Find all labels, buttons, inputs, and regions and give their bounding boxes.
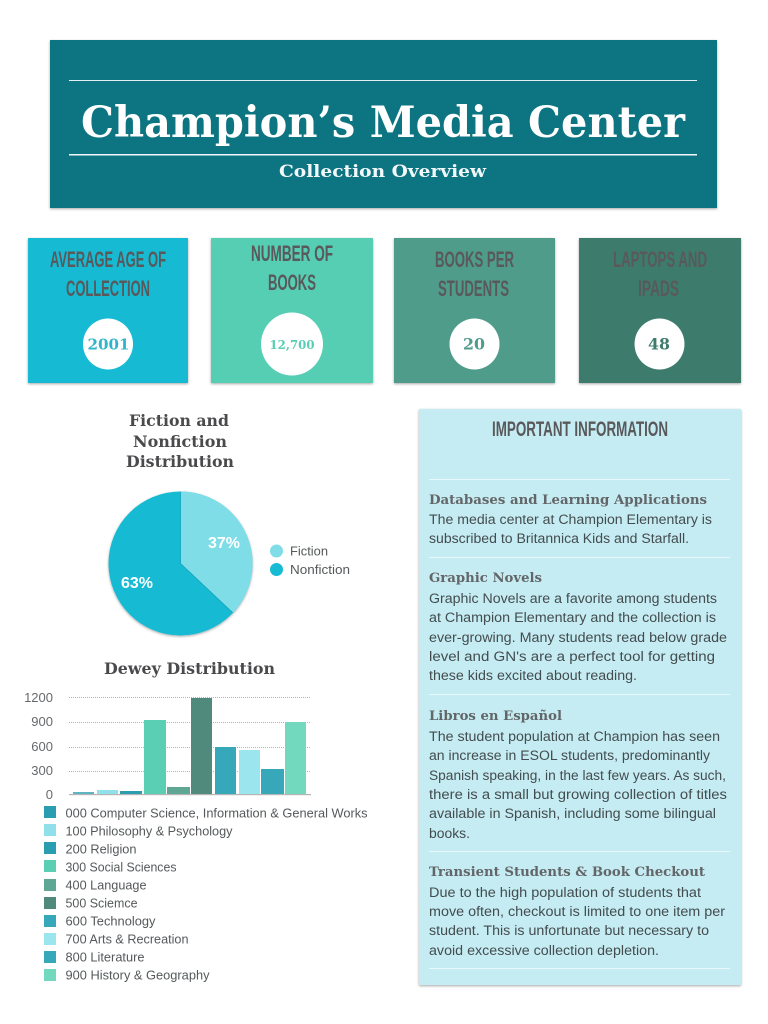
panel: laptops and ipads (579, 238, 741, 383)
panel: books per students: BOOKS PER (435, 247, 514, 272)
bar chart: dewey: 0 (46, 787, 53, 802)
heading: dewey distribution: Dewey Distribution (104, 659, 275, 678)
heading: fiction and nonfiction (126, 411, 234, 471)
text block: libros en espanol: The student population at Champion has seen (429, 729, 720, 744)
panel: number of books: NUMBER OF (251, 241, 333, 266)
heading: fiction and nonfiction: Nonfiction (133, 432, 227, 451)
heading: important information: IMPORTANT INFORMATION (492, 418, 668, 441)
text block: transient students: Due to the high population of students that (429, 885, 701, 900)
pie chart: 37% (208, 535, 240, 552)
bar chart: dewey: 1200 (24, 690, 53, 705)
legend: dewey: 800 Literature (66, 950, 145, 964)
text block: transient students (429, 865, 726, 958)
text block: libros en espanol (429, 709, 727, 841)
legend: dewey: 100 Philosophy & Psychology (66, 824, 233, 838)
text block: transient students: Transient Students & Book Checkout (429, 865, 705, 880)
text block: databases: Databases and Learning Applications (429, 493, 707, 508)
text block: graphic novels (429, 571, 727, 683)
text block: transient students: avoid excessive collection depletion. (429, 943, 659, 958)
text block: graphic novels: Graphic Novels (429, 571, 542, 586)
pie legend (270, 544, 350, 577)
panel: number of books: BOOKS (268, 270, 316, 295)
panel: laptops and ipads: IPADS (638, 276, 679, 301)
panel: books per students: STUDENTS (438, 276, 509, 301)
legend: dewey: 300 Social Sciences (66, 860, 176, 874)
pie legend: Fiction (290, 544, 328, 558)
bar chart: dewey: 600 (31, 739, 53, 754)
panel: average age of collection: AVERAGE AGE OF (50, 247, 166, 272)
text block: graphic novels: Graphic Novels are a favorite among students (429, 591, 717, 606)
text block: libros en espanol: an increase in ESOL students, predominantly (429, 748, 710, 763)
panel: books per students (394, 238, 555, 383)
pie chart (108, 491, 253, 636)
subtitle: Collection Overview (279, 162, 487, 181)
panel: average age of collection: COLLECTION (66, 276, 150, 301)
bar chart: dewey (24, 690, 311, 802)
panel: header banner (50, 40, 717, 208)
text block: libros en espanol: there is a small but growing collection of titles (429, 787, 727, 802)
legend: dewey (44, 806, 368, 982)
text block: libros en espanol: Libros en Español (429, 709, 562, 724)
bar chart: dewey: 300 (31, 763, 53, 778)
legend: dewey: 400 Language (66, 878, 147, 892)
legend: dewey: 600 Technology (66, 914, 156, 928)
panel: number of books: 12,700 (270, 337, 315, 352)
legend: dewey: 000 Computer Science, Information & General Works (66, 806, 368, 820)
text block: transient students: student. This is unfortunate but necessary to (429, 923, 709, 938)
panel: important information (419, 409, 741, 985)
title: Champion’s Media Center (81, 98, 686, 148)
text block: graphic novels: at Champion Elementary and the collection is (429, 610, 716, 625)
panel: average age of collection (28, 238, 188, 383)
text block: transient students: move often, checkout is limited to one item per (429, 904, 726, 919)
text block: libros en espanol: Spanish speaking, in the last few years. As such, (429, 768, 726, 783)
text block: libros en espanol: available in Spanish, including some bilingual (429, 806, 716, 821)
text block: databases: The media center at Champion Elementary is (429, 512, 712, 527)
panel: laptops and ipads: LAPTOPS AND (613, 247, 707, 272)
panel: laptops and ipads: 48 (648, 334, 670, 354)
legend: dewey: 200 Religion (66, 842, 137, 856)
panel: number of books (211, 238, 373, 383)
text block: databases: subscribed to Britannica Kids and Starfall. (429, 531, 689, 546)
legend: dewey: 900 History & Geography (66, 968, 210, 982)
heading: fiction and nonfiction: Distribution (126, 452, 234, 471)
legend: dewey: 700 Arts & Recreation (66, 932, 189, 946)
heading: fiction and nonfiction: Fiction and (129, 411, 229, 430)
legend: dewey: 500 Sciemce (66, 896, 138, 910)
text block: graphic novels: ever-growing. Many students read below grade (429, 630, 727, 645)
pie chart: 63% (121, 575, 153, 592)
text block: graphic novels: level and GN's are a perfect tool for getting (429, 649, 715, 664)
pie legend: Nonfiction (290, 562, 350, 577)
panel: average age of collection: 2001 (88, 336, 130, 354)
text block: graphic novels: these kids excited about reading. (429, 668, 637, 683)
text block: libros en espanol: books. (429, 826, 470, 841)
text block: databases (429, 493, 712, 546)
bar chart: dewey: 900 (31, 714, 53, 729)
panel: books per students: 20 (463, 334, 485, 354)
